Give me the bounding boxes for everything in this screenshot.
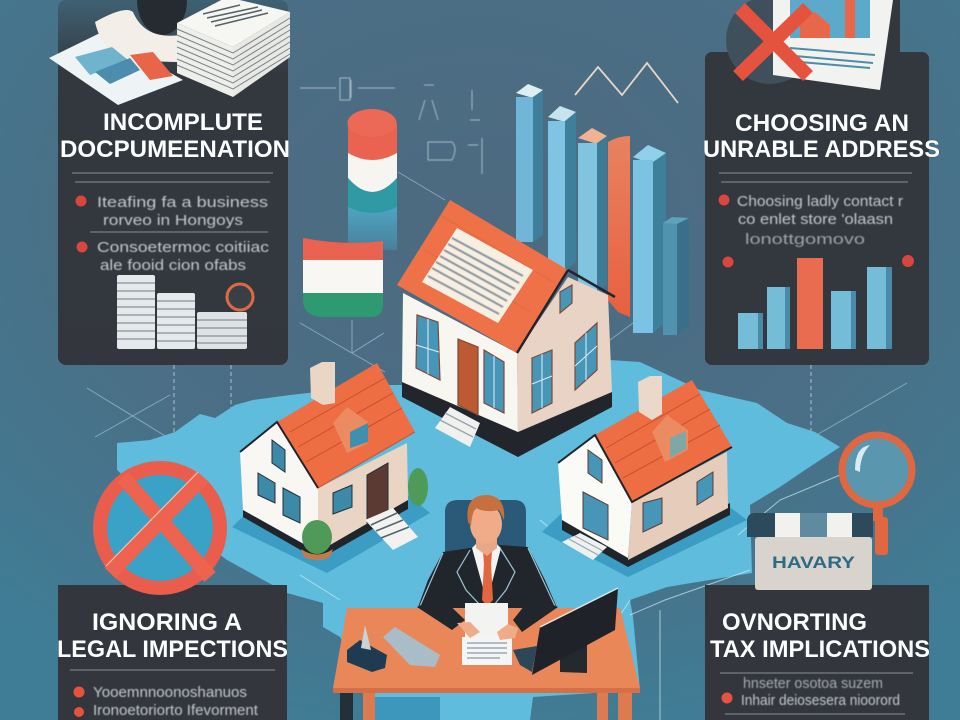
chimney [310, 362, 335, 405]
bar chart [738, 258, 892, 349]
bullet list: Ironoetoriorto Ifevorment [93, 703, 258, 719]
connector lines [87, 172, 907, 445]
panel: choosing an unreliable address: UNRABLE ADDRESS [703, 136, 940, 163]
heading: OVNORTING [722, 609, 867, 636]
dormer [652, 415, 688, 462]
roof [558, 380, 732, 502]
bullet list: co enlet store 'olaasn [738, 212, 893, 228]
hands [457, 622, 518, 640]
shirt [472, 538, 501, 602]
tie [482, 552, 493, 606]
suit [417, 545, 558, 610]
central house [397, 200, 615, 457]
left house [232, 362, 430, 573]
panel: overlooking tax implications: TAX IMPLICATIONS [710, 636, 930, 663]
sleeves [417, 596, 558, 632]
dormer [333, 407, 368, 453]
windows and door [258, 440, 388, 523]
steps [435, 407, 480, 447]
icon: crossed out report [726, 0, 893, 90]
bullet list [722, 676, 900, 709]
bullet list: Consoetermoc coitiiac [97, 240, 269, 256]
sketched notes [300, 78, 482, 174]
icon: mountain line [575, 63, 678, 103]
roof [397, 200, 615, 353]
panel: incomplete documentation: DOCPUMEENATION [60, 136, 290, 163]
bullet list: Yooemnnoonoshanuos [93, 685, 247, 701]
icon: Hungarian flag cylinder [348, 109, 397, 250]
steps [562, 533, 607, 560]
plants [301, 468, 428, 560]
heading: IGNORING A [92, 609, 242, 636]
bullet list [718, 194, 914, 268]
tablet [383, 627, 440, 667]
bullet list: Iteafing fa a business [97, 195, 268, 211]
icon: document pile [49, 0, 290, 105]
heading: CHOOSING AN [735, 110, 909, 137]
chair [445, 500, 526, 570]
steps [365, 508, 418, 550]
hair [467, 495, 504, 526]
document on roof [422, 228, 533, 323]
icon: paper stacks [117, 275, 253, 349]
map of Hungary [117, 360, 840, 720]
panel: choosing an unreliable address [703, 0, 940, 365]
bullet list: ale fooid cion ofabs [100, 258, 246, 274]
neck and face [476, 525, 497, 556]
windows and door [416, 285, 597, 415]
monitor [513, 588, 618, 675]
icon: Hungarian flag [303, 238, 383, 317]
icon: magnifying glass [842, 435, 912, 555]
right house [542, 376, 747, 577]
panel: ignoring legal implications: LEGAL IMPECTIONS [57, 636, 288, 663]
person at desk [417, 495, 558, 610]
windows [583, 450, 713, 540]
bullet list: hnseter osotoa suzem [743, 676, 883, 692]
lapels [420, 548, 555, 606]
icon: prohibited sign [100, 468, 220, 588]
sign text: HAVARY [772, 553, 856, 572]
bullet list [76, 195, 269, 274]
chimney [638, 376, 662, 420]
icon: storefront sign [747, 513, 873, 590]
bullet list: lonottgomovo [745, 232, 865, 248]
roof [240, 363, 415, 488]
panel: ignoring legal implications [57, 585, 288, 720]
heading: INCOMPLUTE [103, 109, 263, 136]
panel: incomplete documentation [49, 0, 290, 365]
bullet list [74, 685, 258, 719]
bullet list: Choosing ladly contact r [737, 194, 903, 210]
panel: overlooking tax implications [705, 585, 930, 720]
documents [462, 603, 512, 665]
chart: tall isometric bars [516, 84, 689, 335]
pen holder [347, 625, 387, 672]
desk [333, 588, 640, 720]
bullet list: Inhair deiosesera nioorord [741, 693, 900, 709]
bullet list: rorveo in Hongoys [103, 213, 243, 229]
